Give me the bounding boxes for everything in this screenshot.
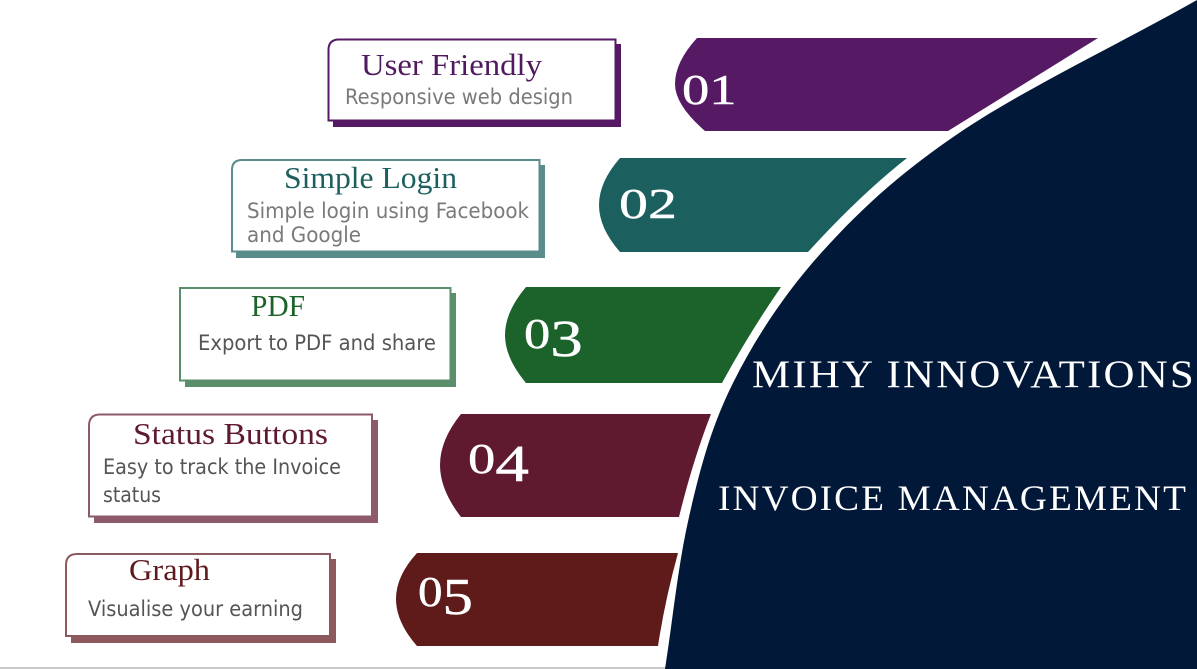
band 05 bbox=[396, 553, 678, 646]
band 02: 02 bbox=[619, 181, 677, 227]
card: User Friendly bbox=[328, 40, 621, 127]
card: Simple Login: Simple login using Facebook bbox=[247, 199, 530, 223]
band 04 bbox=[440, 414, 711, 517]
item 02: Simple Login bbox=[232, 158, 907, 258]
dark quarter-circle panel bbox=[665, 0, 1197, 669]
item 04: Status Buttons bbox=[89, 414, 711, 523]
card: PDF: PDF bbox=[251, 288, 305, 323]
card: PDF: Export to PDF and share bbox=[198, 331, 436, 355]
band 02 bbox=[599, 158, 907, 252]
band 01: 01 bbox=[682, 67, 737, 113]
card: Graph bbox=[66, 552, 336, 643]
band 04: 4 bbox=[495, 435, 529, 493]
card: Status Buttons: status bbox=[103, 483, 161, 507]
card: PDF bbox=[180, 288, 456, 387]
title: MIHY INNOVATIONS: MIHY INNOVATIONS bbox=[752, 353, 1196, 396]
card: User Friendly: User Friendly bbox=[361, 47, 543, 82]
item 03: PDF bbox=[180, 287, 781, 387]
band 03: 3 bbox=[550, 310, 583, 367]
card: Graph: Graph bbox=[129, 552, 211, 587]
card: User Friendly: Responsive web design bbox=[345, 85, 573, 109]
band 01 bbox=[675, 38, 1098, 131]
band 04: 0 bbox=[468, 436, 495, 482]
band 05: 0 bbox=[418, 568, 443, 615]
band 03: 0 bbox=[524, 312, 550, 358]
card: Simple Login: Simple Login bbox=[284, 160, 458, 195]
card: Simple Login: and Google bbox=[247, 223, 361, 247]
band 03 bbox=[505, 287, 781, 383]
card: Simple Login bbox=[232, 160, 545, 258]
item 05: Graph bbox=[66, 552, 678, 646]
item 01: User Friendly bbox=[328, 38, 1098, 131]
card: Status Buttons: Easy to track the Invoice bbox=[103, 455, 341, 479]
card: Graph: Visualise your earning bbox=[88, 597, 303, 621]
card: Status Buttons bbox=[89, 414, 378, 523]
title: INVOICE MANAGEMENT: INVOICE MANAGEMENT bbox=[718, 478, 1188, 518]
card: Status Buttons: Status Buttons bbox=[133, 416, 328, 451]
band 05: 5 bbox=[443, 569, 473, 626]
